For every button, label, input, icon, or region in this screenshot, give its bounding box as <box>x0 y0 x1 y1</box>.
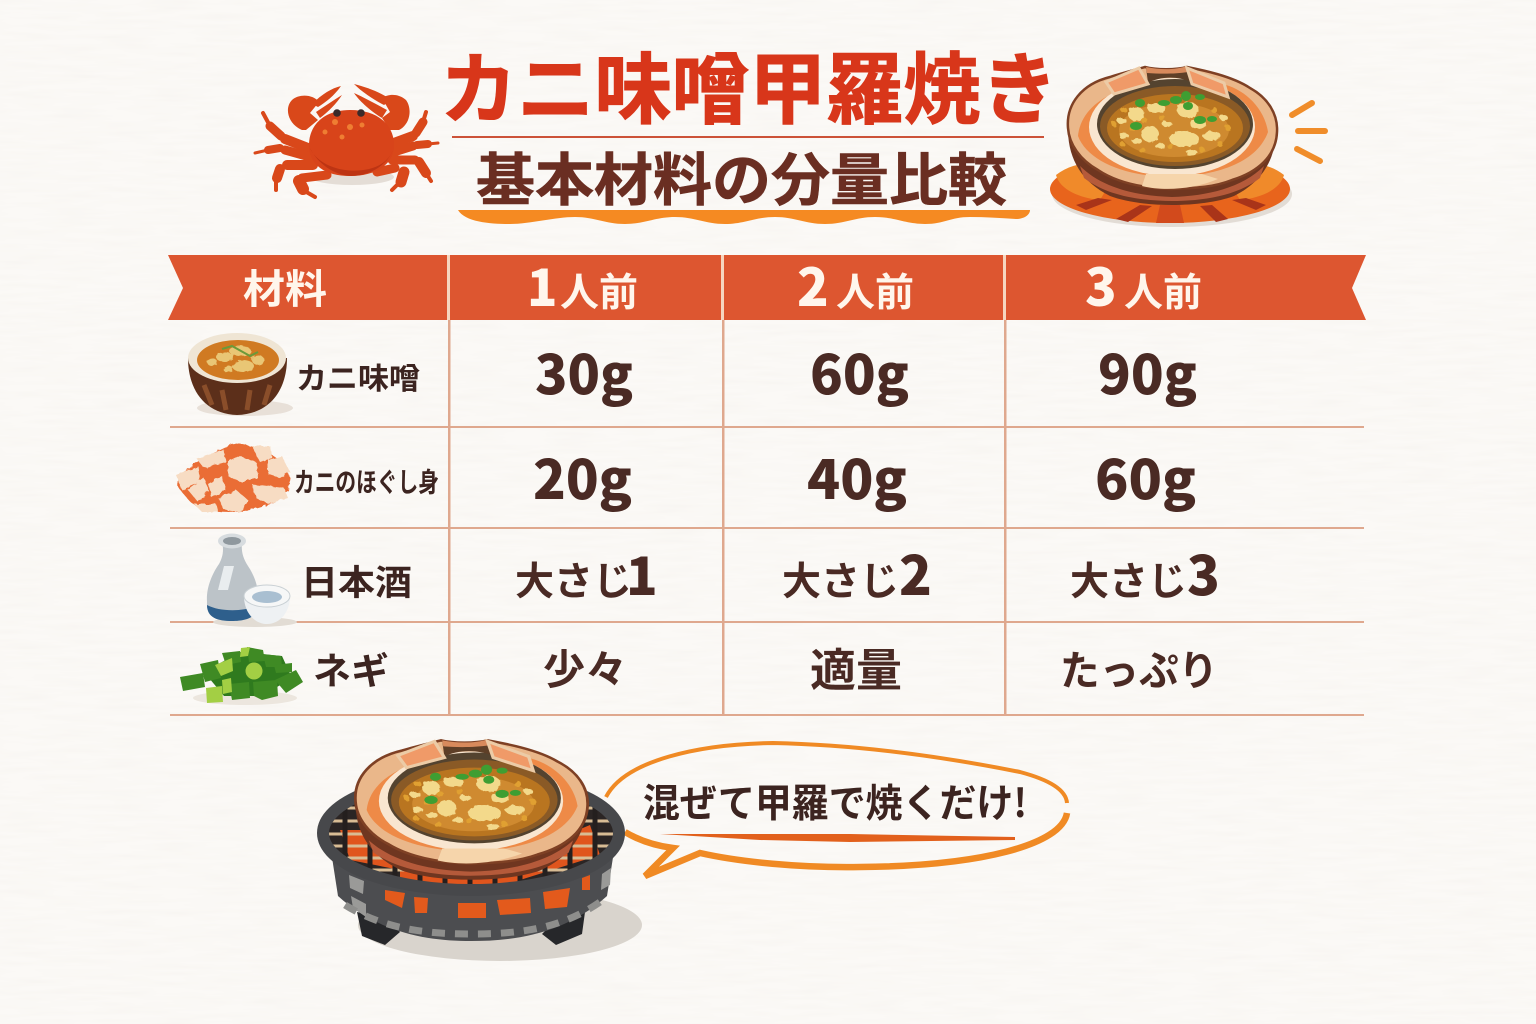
value 90g: 90g <box>1098 331 1197 410</box>
value 30g: 30g <box>535 331 633 410</box>
value 大さじ2: 大さじ <box>782 551 899 607</box>
speech bubble <box>606 743 1067 876</box>
value 60g: 60g <box>1095 436 1196 515</box>
value 40g: 40g <box>807 436 907 515</box>
value 大さじ3: 3 <box>1187 532 1220 611</box>
bubble text: 混ぜて甲羅で焼くだけ! <box>643 773 1027 829</box>
value 適量: 適量 <box>810 634 902 699</box>
icon: sake bottle and cup <box>207 534 297 627</box>
grill shadow <box>358 889 642 961</box>
header: 2人前: 2 <box>797 246 829 321</box>
value たっぷり: たっぷり <box>1060 637 1218 697</box>
grill grate <box>329 804 613 884</box>
bubble outline <box>606 743 1067 876</box>
row: ネギ <box>180 634 1218 705</box>
title divider line <box>452 136 1044 138</box>
table <box>168 246 1366 716</box>
value 大さじ1: 1 <box>626 535 658 610</box>
icon: chopped green onion <box>180 647 303 705</box>
bubble underline <box>660 834 1015 842</box>
grill ring <box>323 776 619 890</box>
value 20g: 20g <box>533 436 632 515</box>
row: カニのほぐし身 <box>176 436 1196 515</box>
icon: miso bowl <box>188 333 293 416</box>
grill feet <box>357 912 585 945</box>
value 60g: 60g <box>810 331 909 410</box>
value 大さじ1: 大さじ <box>515 551 632 607</box>
grill side blocks <box>349 868 611 917</box>
crab shell on grill <box>355 739 588 880</box>
table header ribbon <box>168 255 1366 320</box>
wavy underline <box>458 210 1030 224</box>
table grid lines <box>170 320 1364 716</box>
label: 日本酒: 日本酒 <box>301 555 412 606</box>
value 大さじ3: 大さじ <box>1070 551 1187 607</box>
grill checker band <box>345 902 600 934</box>
icon: crab <box>255 84 438 197</box>
icon: sparkle marks <box>1292 103 1325 161</box>
burning coals <box>385 875 590 918</box>
label: カニのほぐし身: カニのほぐし身 <box>294 461 439 500</box>
header: 1人前: 人前 <box>560 262 638 318</box>
header: 1人前: 1 <box>527 249 557 321</box>
subtitle: 基本材料の分量比較 <box>476 135 1007 217</box>
label: ネギ: ネギ <box>313 641 389 695</box>
title: カニ味噌甲羅焼き <box>440 28 1058 140</box>
label: カニ味噌: カニ味噌 <box>296 354 420 398</box>
header: 材料: 材料 <box>243 257 327 315</box>
icon: charcoal grill with crab shell <box>320 739 642 961</box>
header grid lines <box>447 255 1006 320</box>
header: 3人前: 人前 <box>1124 262 1202 318</box>
value 少々: 少々 <box>543 636 627 696</box>
header: 3人前: 3 <box>1085 246 1117 321</box>
icon: crab shell dish on placemat <box>1050 66 1292 227</box>
header: 2人前: 人前 <box>836 262 914 318</box>
icon: crab meat <box>176 443 290 512</box>
grill body <box>329 838 616 941</box>
value 大さじ2: 2 <box>899 532 932 611</box>
row: 日本酒 <box>207 532 1220 627</box>
row: カニ味噌 <box>188 331 1197 416</box>
